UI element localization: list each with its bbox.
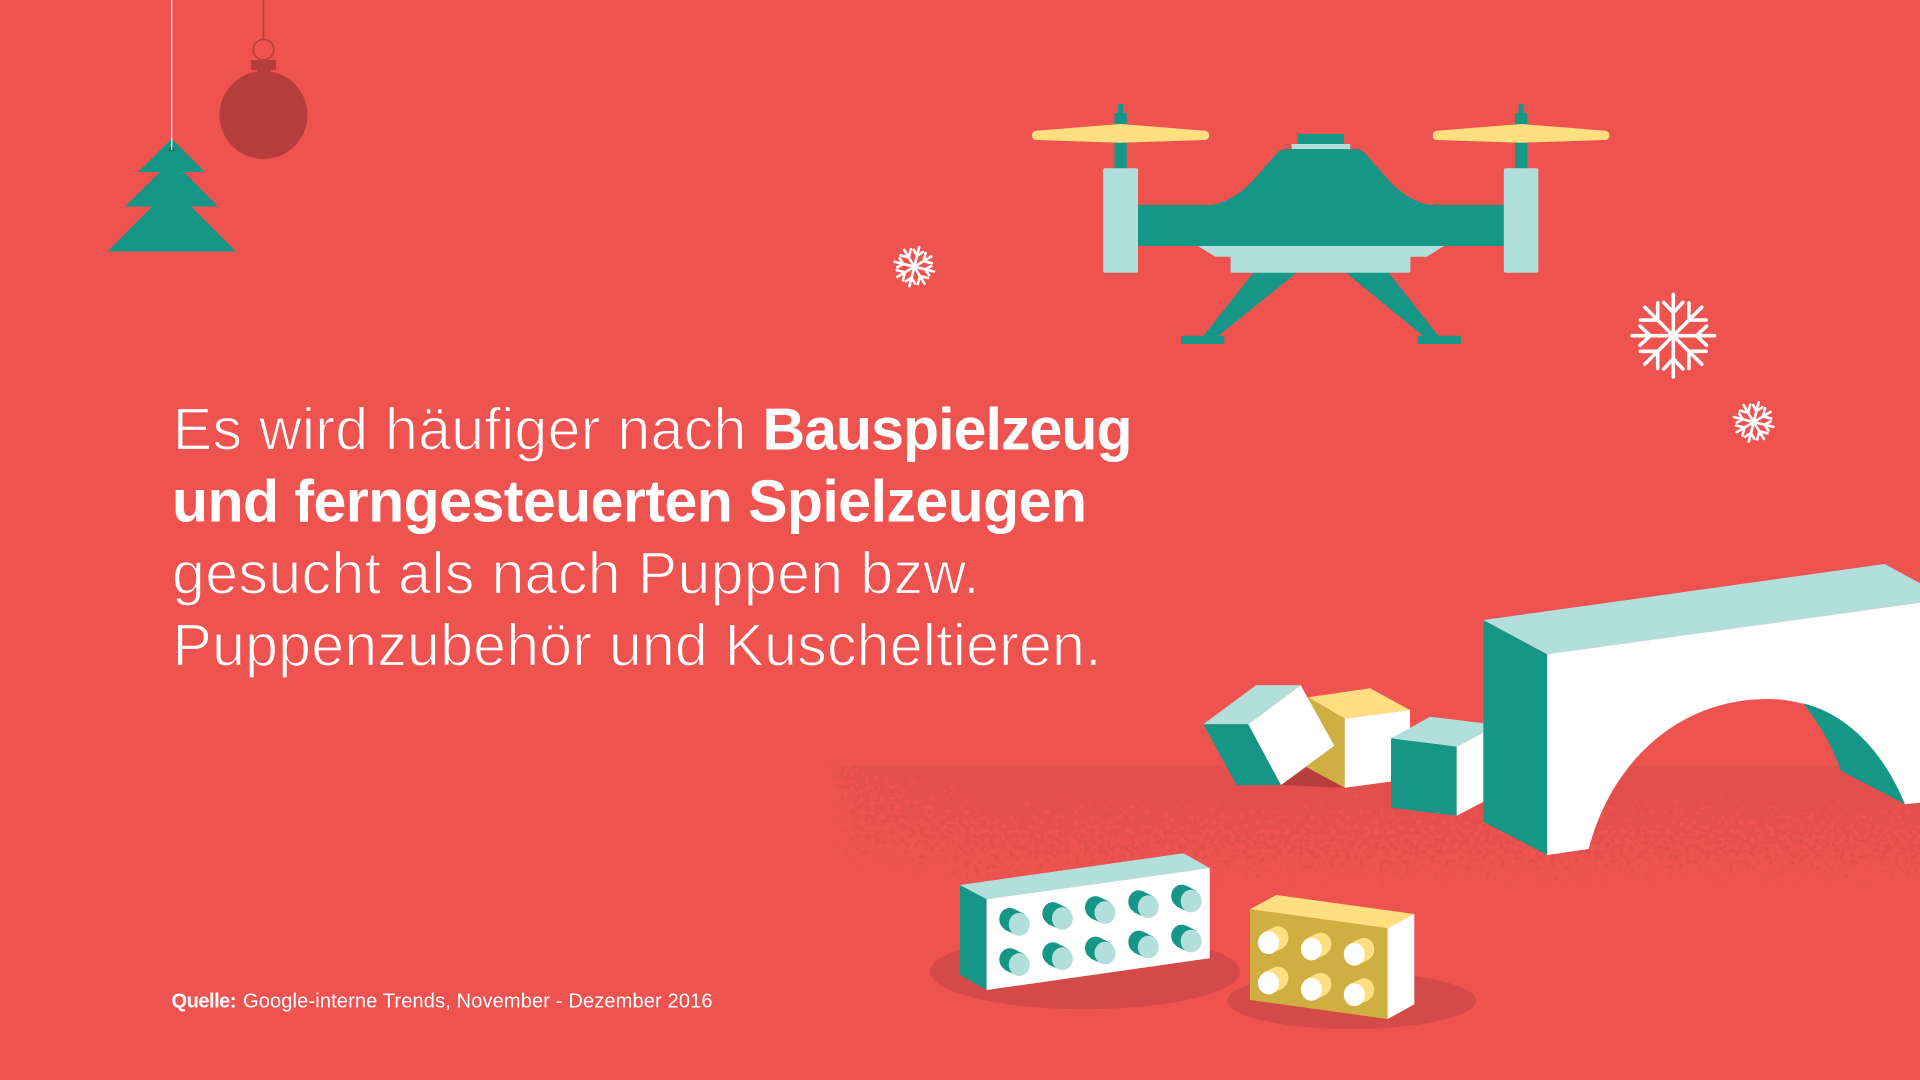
drone rotor shafts bbox=[1114, 104, 1527, 169]
headline text: und ferngesteuerten Spielzeugen bbox=[172, 469, 1087, 535]
tilted cube bbox=[1203, 685, 1334, 785]
shadow under white brick bbox=[930, 934, 1240, 1009]
drone legs bbox=[1181, 272, 1461, 344]
drone propellers bbox=[1032, 124, 1609, 143]
drone underside bbox=[1198, 246, 1444, 273]
shadow between cubes bbox=[1281, 767, 1345, 788]
white brick with teal studs bbox=[960, 853, 1210, 990]
source note: Quelle: bbox=[172, 991, 236, 1013]
icon: hanging christmas tree bbox=[108, 0, 236, 252]
icon: drone bbox=[1032, 104, 1609, 344]
yellow cube bbox=[1307, 688, 1410, 788]
source note: Google-interne Trends, November - Dezember 2016 bbox=[243, 991, 712, 1013]
headline text: gesucht als nach Puppen bzw. bbox=[172, 540, 980, 606]
icon: hanging bauble bbox=[220, 0, 308, 159]
headline text: Es wird häufiger nach bbox=[173, 396, 746, 462]
drone top cap bbox=[1292, 134, 1350, 149]
shadow under yellow brick bbox=[1227, 972, 1476, 1029]
icon: small snowflake right bbox=[1729, 398, 1778, 446]
icon: large snowflake bbox=[1632, 294, 1715, 377]
headline text bbox=[172, 396, 1132, 679]
drone motor housings bbox=[1103, 168, 1538, 273]
icon: small snowflake left bbox=[890, 242, 939, 291]
arch block bbox=[1483, 564, 1920, 855]
yellow brick with white studs bbox=[1250, 895, 1414, 1019]
drone body bbox=[1138, 149, 1504, 246]
headline text: Bauspielzeug bbox=[762, 396, 1132, 462]
textured ground shadow bbox=[800, 766, 1920, 886]
headline text: Puppenzubehör und Kuscheltieren. bbox=[172, 613, 1102, 679]
small teal cube bbox=[1391, 717, 1483, 816]
